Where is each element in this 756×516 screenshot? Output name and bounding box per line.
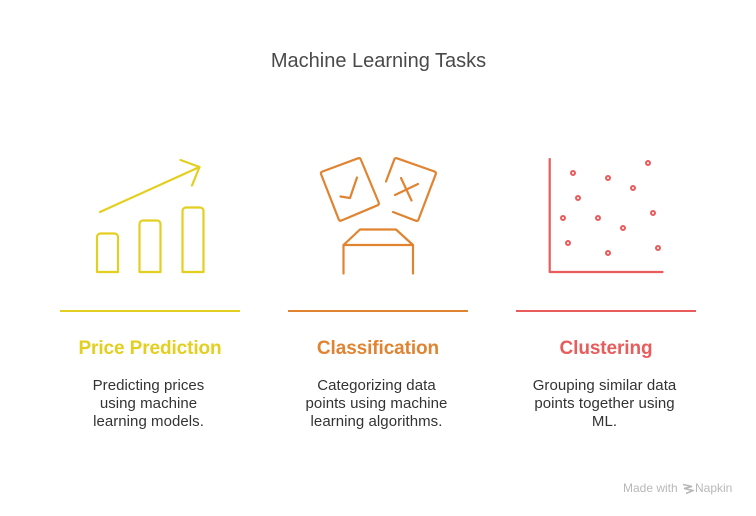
icon: napkin logo — [682, 484, 694, 494]
text: clustering description: points together using — [534, 395, 675, 412]
panel: clustering — [516, 310, 696, 430]
text: price prediction description: learning models. — [93, 413, 204, 430]
text: classification description — [306, 377, 447, 430]
heading: clustering: Clustering — [560, 338, 652, 359]
text: clustering description: ML. — [592, 413, 617, 430]
watermark: made with napkin — [623, 481, 732, 495]
panel: classification — [288, 310, 468, 430]
watermark: made with napkin: Made with — [623, 481, 678, 495]
text: price prediction description: using machine — [100, 395, 197, 412]
title: Machine Learning Tasks — [271, 50, 486, 72]
text: clustering description — [533, 377, 676, 430]
heading: price prediction: Price Prediction — [78, 338, 222, 359]
text: classification description: learning algorithms. — [311, 413, 442, 430]
text: classification description: points using machine — [306, 395, 447, 412]
text: price prediction description: Predicting prices — [93, 377, 204, 394]
heading: classification: Classification — [317, 338, 439, 359]
watermark: made with napkin: Napkin — [695, 481, 732, 495]
text: classification description: Categorizing data — [317, 377, 436, 394]
text: clustering description: Grouping similar data — [533, 377, 676, 394]
text: price prediction description — [93, 377, 204, 430]
panel: price prediction — [60, 310, 240, 430]
